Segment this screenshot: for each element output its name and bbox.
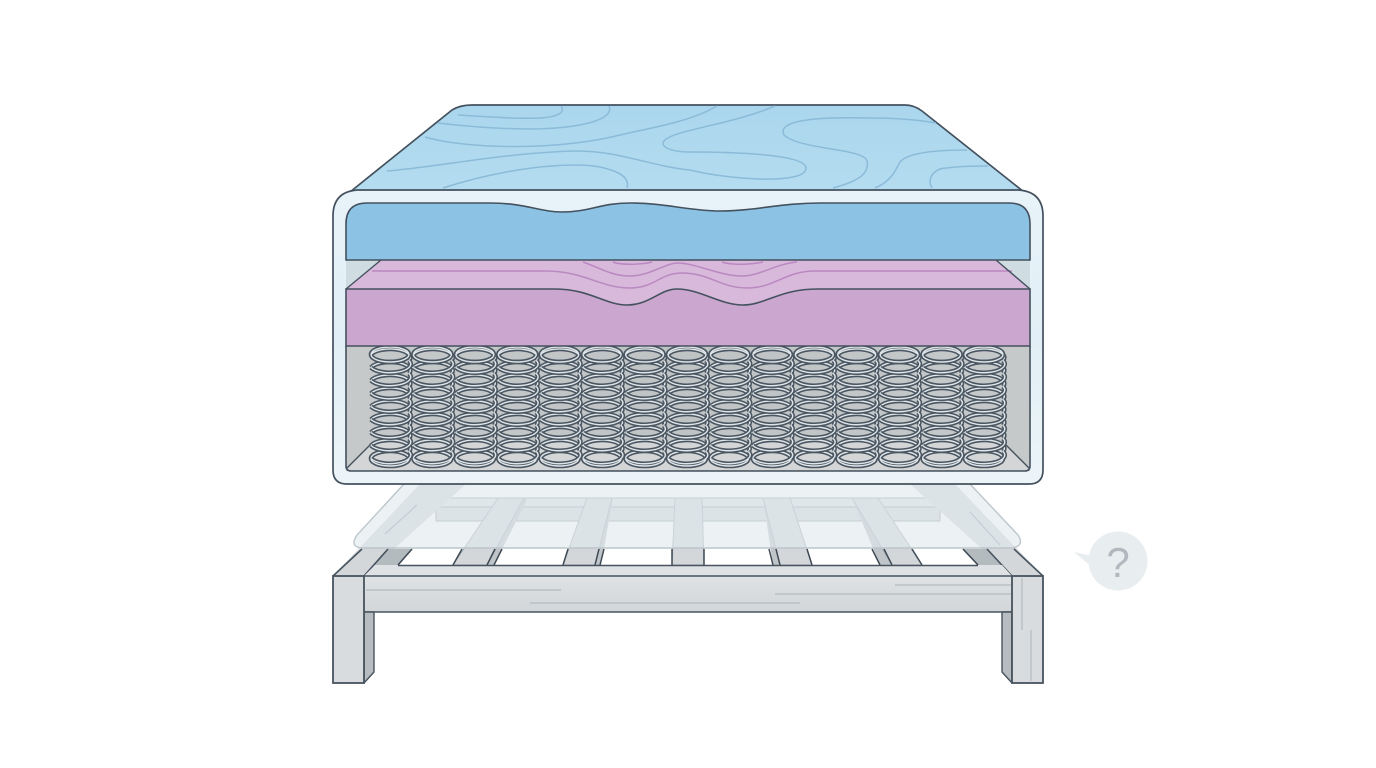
- bed frame: [333, 484, 1043, 683]
- right side rail: [910, 484, 1043, 576]
- left side rail: [333, 484, 466, 576]
- mattress top surface: [350, 105, 1024, 192]
- coil springs: [371, 347, 1005, 466]
- slat 4: [763, 498, 812, 565]
- slat 2: [563, 498, 613, 565]
- question mark speech bubble: [1074, 532, 1148, 590]
- slats: [453, 498, 922, 565]
- bubble tail: [1074, 552, 1092, 567]
- bubble circle: [1088, 532, 1148, 590]
- purple front block: [346, 289, 1030, 346]
- left leg: [333, 576, 374, 683]
- purple back surface: [346, 260, 1030, 310]
- spring layer: [346, 346, 1030, 471]
- slat 3: [672, 498, 704, 565]
- question mark: ?: [1106, 539, 1130, 586]
- spring chamber: [346, 346, 1030, 471]
- slat 5: [852, 498, 922, 565]
- mattress cover shell: [333, 190, 1043, 484]
- front rail: [364, 565, 1012, 612]
- slat 1: [453, 498, 528, 565]
- translucent platform: [354, 484, 1020, 548]
- back rail: [436, 498, 940, 521]
- purple foam layer: [346, 260, 1030, 346]
- blue foam layer: [346, 203, 1030, 260]
- purple contour lines: [372, 262, 1012, 288]
- contour lines: [387, 106, 988, 188]
- right leg: [1002, 576, 1043, 683]
- mattress: [333, 105, 1043, 484]
